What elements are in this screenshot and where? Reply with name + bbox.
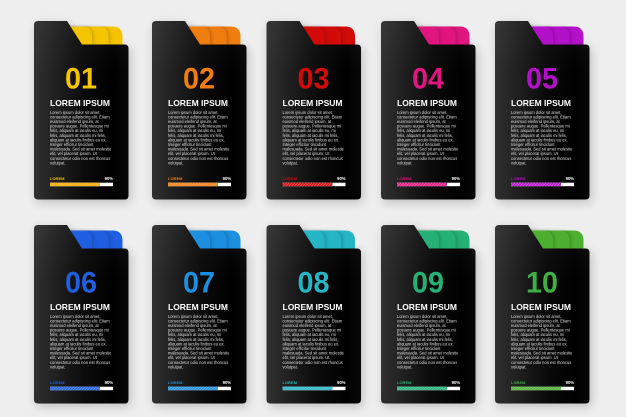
card 05 (495, 21, 592, 202)
card 08: 08 (298, 266, 330, 300)
card 09: 09 (412, 266, 444, 300)
card 04: LOREM (397, 176, 412, 181)
card 09: LOREM (397, 380, 412, 385)
card 10: 10 (526, 266, 558, 300)
card 08 (266, 225, 363, 406)
card 04 (381, 21, 478, 202)
card 06: 06 (65, 266, 97, 300)
card 06 (34, 225, 130, 406)
card 02: LOREM (168, 176, 183, 181)
card 07 (152, 225, 248, 406)
card 10: LOREM (511, 380, 526, 385)
card 07: 07 (183, 266, 215, 300)
card 03: 03 (298, 62, 330, 96)
card 01: 01 (65, 62, 97, 96)
card 01 (34, 21, 130, 202)
card 10 (495, 225, 592, 406)
card 09 (381, 225, 478, 406)
card 05: LOREM (511, 176, 526, 181)
card 04: 04 (412, 62, 445, 96)
card 03 (266, 21, 363, 202)
card 06: LOREM (50, 380, 65, 385)
card 02 (152, 21, 248, 202)
card 05: 05 (526, 62, 558, 96)
card 01: LOREM (50, 176, 65, 181)
card 08: LOREM (282, 380, 298, 385)
card 03: LOREM (282, 176, 298, 181)
card 07: LOREM (168, 380, 183, 385)
card 02: 02 (183, 62, 215, 96)
